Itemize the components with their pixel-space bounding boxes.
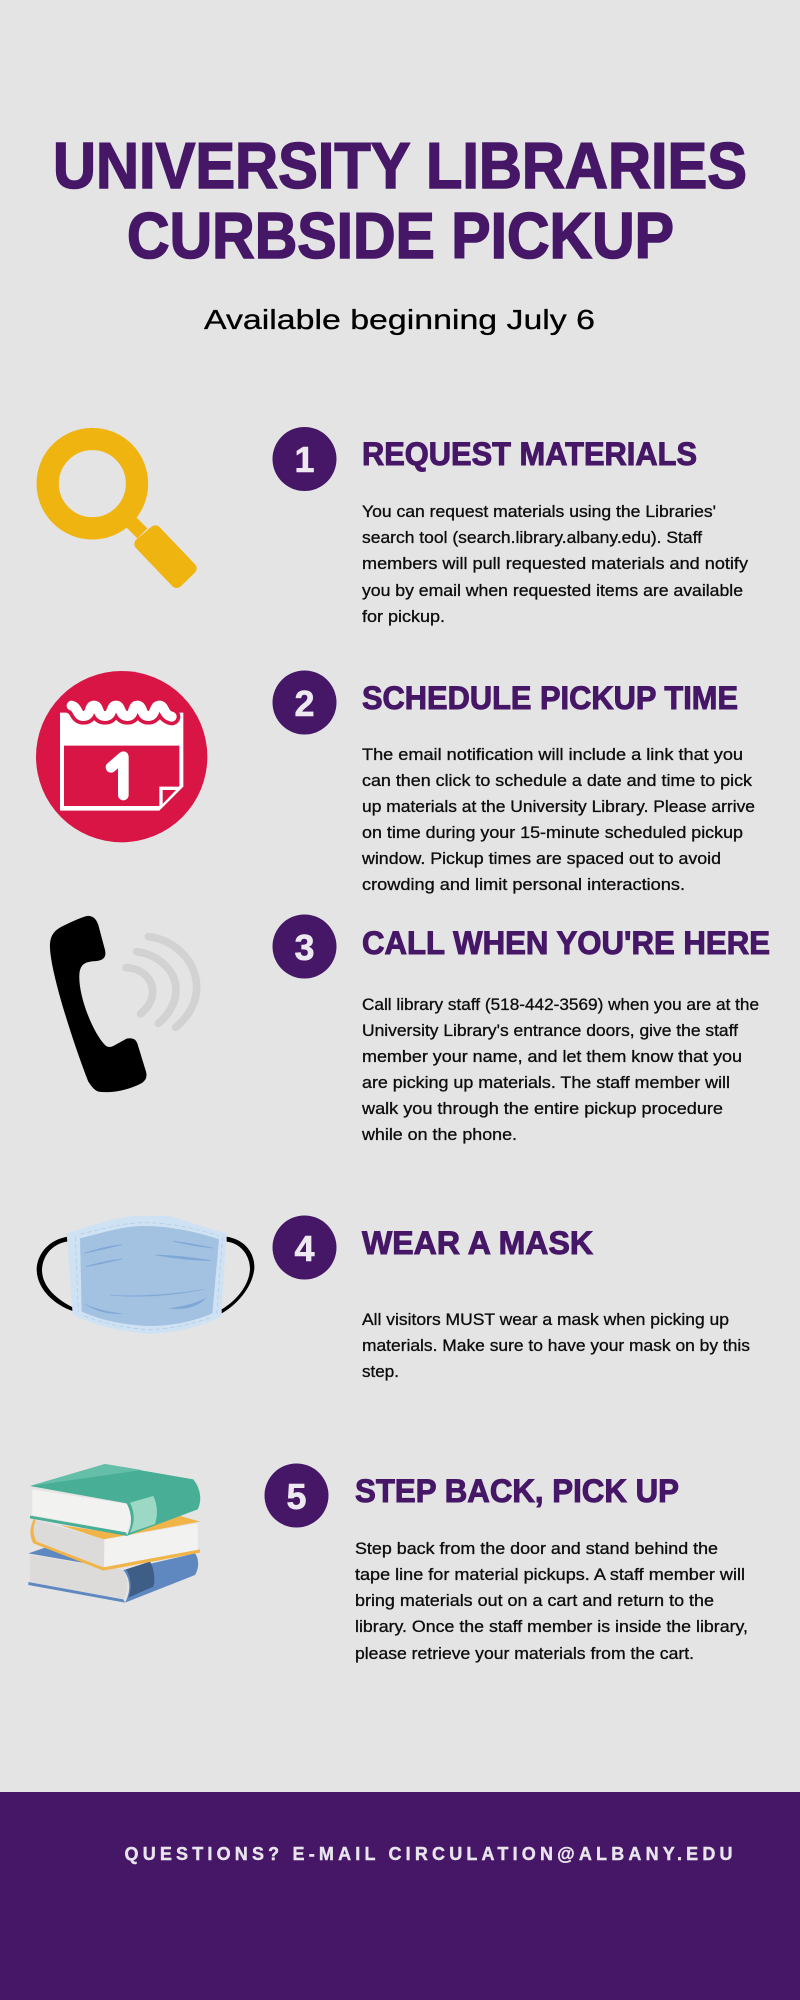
title: CURBSIDE PICKUP bbox=[127, 199, 674, 272]
text: step 1 description: for pickup. bbox=[362, 608, 445, 626]
footer band bbox=[0, 1792, 800, 2000]
subtitle: Available beginning July 6 bbox=[204, 304, 595, 335]
step number 3: 3 bbox=[294, 927, 315, 968]
text: step 2 description: window. Pickup times are spaced out to avoid bbox=[361, 850, 721, 868]
heading: call when you're here: CALL WHEN YOU'RE HERE bbox=[362, 925, 770, 961]
text: step 3 description: are picking up materials. The staff member will bbox=[362, 1074, 730, 1092]
text: step 2 description bbox=[361, 746, 755, 894]
panel: step 4 bbox=[272, 1216, 750, 1381]
text: step 4 description: materials. Make sure to have your mask on by this bbox=[362, 1337, 750, 1355]
text: step 5 description bbox=[355, 1540, 748, 1663]
text: step 2 description: can then click to schedule a date and time to pick bbox=[362, 772, 753, 790]
step number 1: 1 bbox=[294, 439, 315, 480]
step number 1 bbox=[272, 427, 336, 491]
title bbox=[53, 129, 747, 272]
step number 2 bbox=[272, 670, 336, 734]
text: step 1 description: you by email when requested items are available bbox=[362, 582, 743, 600]
text: step 5 description: Step back from the door and stand behind the bbox=[355, 1540, 718, 1558]
text: step 5 description: library. Once the staff member is inside the library, bbox=[355, 1618, 748, 1636]
icon: face mask bbox=[37, 1216, 254, 1334]
text: step 2 description: crowding and limit personal interactions. bbox=[362, 876, 685, 894]
icon: telephone bbox=[50, 916, 197, 1092]
text: step 2 description: on time during your 15-minute scheduled pickup bbox=[362, 824, 743, 842]
text: step 5 description: bring materials out on a cart and return to the bbox=[355, 1592, 714, 1610]
text: step 3 description: University Library's entrance doors, give the staff bbox=[362, 1022, 738, 1040]
text: step 1 description: You can request materials using the Libraries' bbox=[362, 503, 716, 521]
panel: step 3 bbox=[272, 914, 770, 1144]
panel: step 2 bbox=[272, 670, 755, 894]
panel: step 1 bbox=[272, 427, 749, 626]
text: step 2 description: up materials at the University Library. Please arrive bbox=[362, 798, 755, 816]
text: step 1 description: members will pull requested materials and notify bbox=[362, 555, 749, 573]
text: step 1 description: search tool (search.library.albany.edu). Staff bbox=[362, 529, 702, 547]
text: step 1 description bbox=[362, 503, 749, 626]
heading: schedule pickup time: SCHEDULE PICKUP TIME bbox=[362, 680, 738, 716]
text: step 3 description bbox=[361, 996, 759, 1144]
icon: stack of books bbox=[28, 1464, 200, 1603]
text: step 3 description: while on the phone. bbox=[361, 1126, 517, 1144]
middle yellow book bbox=[30, 1515, 200, 1571]
heading: request materials: REQUEST MATERIALS bbox=[362, 436, 697, 472]
step number 3 bbox=[272, 914, 336, 978]
panel: step 5 bbox=[264, 1464, 748, 1663]
bottom blue book bbox=[28, 1548, 198, 1603]
heading: step back, pick up: STEP BACK, PICK UP bbox=[355, 1473, 679, 1509]
text: step 5 description: tape line for material pickups. A staff member will bbox=[355, 1566, 745, 1584]
text: step 3 description: walk you through the entire pickup procedure bbox=[361, 1100, 723, 1118]
heading: wear a mask: WEAR A MASK bbox=[362, 1225, 594, 1261]
text: step 3 description: member your name, and let them know that you bbox=[362, 1048, 742, 1066]
step number 4 bbox=[272, 1216, 336, 1280]
icon: magnifying glass bbox=[48, 439, 191, 582]
title: UNIVERSITY LIBRARIES bbox=[53, 129, 747, 202]
step number 2: 2 bbox=[294, 683, 315, 724]
icon: calendar bbox=[36, 671, 207, 842]
text: step 4 description: All visitors MUST wear a mask when picking up bbox=[362, 1311, 729, 1329]
text: step 4 description bbox=[362, 1311, 750, 1381]
footer contact text: QUESTIONS? E-MAIL CIRCULATION@ALBANY.EDU bbox=[124, 1844, 732, 1864]
text: step 5 description: please retrieve your materials from the cart. bbox=[355, 1645, 694, 1663]
top green book bbox=[30, 1464, 200, 1536]
step number 4: 4 bbox=[294, 1228, 315, 1269]
text: step 4 description: step. bbox=[362, 1363, 399, 1381]
text: step 3 description: Call library staff (518-442-3569) when you are at the bbox=[362, 996, 759, 1014]
step number 5: 5 bbox=[286, 1476, 307, 1517]
text: step 2 description: The email notification will include a link that you bbox=[362, 746, 743, 764]
step number 5 bbox=[264, 1464, 328, 1528]
